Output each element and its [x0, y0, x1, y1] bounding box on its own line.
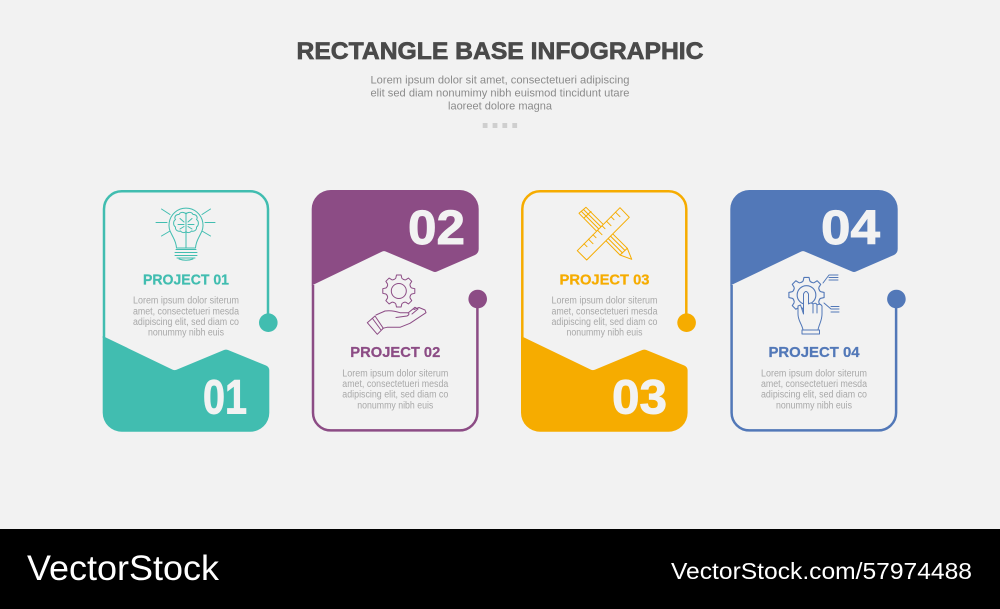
body text: adipiscing elit, sed diam co: [342, 390, 449, 400]
body text: Lorem ipsum dolor siterum: [552, 296, 658, 306]
body text: Lorem ipsum dolor siterum: [342, 368, 448, 380]
card outline and connector: [313, 285, 477, 430]
body text: adipiscing elit, sed diam co: [552, 317, 658, 328]
project heading: PROJECT 02: [350, 344, 440, 361]
project heading: PROJECT 04: [768, 344, 860, 361]
title divider squares: [483, 123, 517, 128]
number band: [521, 336, 688, 432]
panel: project 04: [730, 190, 906, 430]
icon: hand holding gear: [367, 275, 426, 334]
panel: project 03: [521, 191, 696, 432]
number: 02: [408, 202, 465, 255]
project heading: PROJECT 01: [143, 272, 229, 288]
subtitle text: [370, 74, 630, 112]
connector dot: [259, 313, 278, 332]
number: 01: [203, 372, 247, 424]
body text: Lorem ipsum dolor siterum: [133, 296, 239, 306]
icon: crossed ruler and pencil: [577, 207, 632, 260]
panel: project 02: [312, 190, 487, 430]
project heading: PROJECT 03: [560, 272, 650, 288]
footer url: VectorStock.com/57974488: [671, 558, 972, 584]
body text: adipiscing elit, sed diam co: [761, 390, 867, 400]
body text: [552, 296, 658, 338]
subtitle text: laoreet dolore magna: [448, 100, 553, 112]
body text: nonummy nibh euis: [148, 328, 224, 338]
number: 04: [821, 202, 880, 255]
connector dot: [677, 313, 696, 332]
subtitle text: elit sed diam nonumimy nibh euismod tincidunt utare: [370, 88, 630, 100]
body text: amet, consectetueri mesda: [552, 306, 658, 318]
body text: nonummy nibh euis: [566, 328, 643, 338]
body text: amet, consectetueri mesda: [342, 379, 449, 390]
icon: hand touching gear: [789, 275, 839, 334]
body text: [761, 368, 867, 412]
number: 03: [612, 372, 667, 424]
body text: Lorem ipsum dolor siterum: [761, 368, 867, 380]
body text: adipiscing elit, sed diam co: [133, 317, 239, 328]
number band: [312, 190, 479, 286]
body text: amet, consectetueri mesda: [761, 379, 867, 390]
title: RECTANGLE BASE INFOGRAPHIC: [296, 38, 704, 65]
body text: [342, 368, 449, 412]
panel: project 01: [103, 191, 278, 432]
body text: nonummy nibh euis: [776, 400, 852, 412]
number band: [730, 190, 898, 286]
body text: amet, consectetueri mesda: [133, 306, 239, 318]
subtitle text: Lorem ipsum dolor sit amet, consectetueri adipiscing: [370, 74, 630, 86]
connector dot: [468, 290, 487, 308]
footer logo: VectorStock: [27, 549, 220, 588]
card outline and connector: [522, 191, 686, 338]
number band: [103, 336, 269, 432]
footer bar: [0, 529, 1000, 609]
body text: nonummy nibh euis: [357, 400, 433, 412]
card outline and connector: [104, 191, 268, 338]
icon: light bulb with brain: [156, 208, 215, 260]
body text: [133, 296, 239, 338]
connector dot: [887, 290, 906, 308]
card outline and connector: [732, 285, 896, 430]
